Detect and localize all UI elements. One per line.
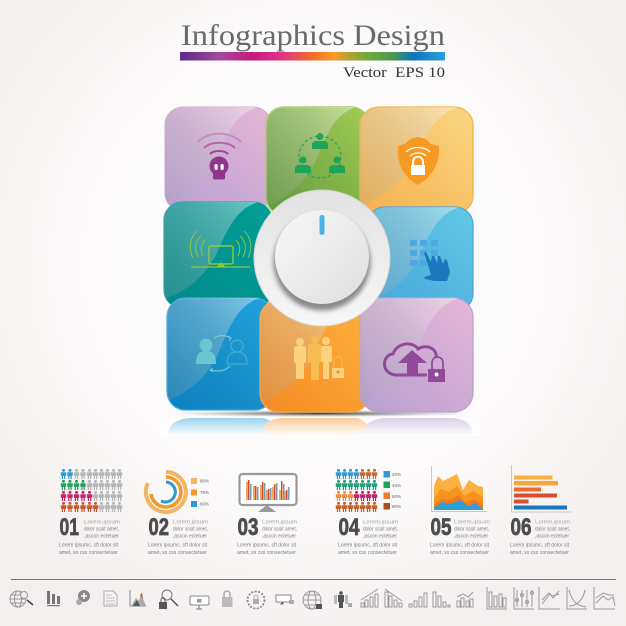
icon: falling bars (385, 589, 402, 607)
chart 2: radial rings (146, 472, 186, 512)
block 02 text: amet, xx css consectetuer (148, 550, 207, 556)
block 05 text (430, 514, 490, 556)
block 02 text: 02 (148, 514, 169, 541)
block 05 text: Lorem,ipsum (454, 520, 490, 526)
icon: small falling bars (433, 592, 450, 607)
icon: line chart (539, 587, 560, 609)
control knob (254, 190, 390, 326)
block 01 text (59, 514, 120, 556)
block 06 text: Lorem ipsumc, sft dolor sit (510, 542, 570, 548)
icon: lock monitor (190, 596, 209, 609)
block 06 text: Lorem,ipsum (535, 520, 570, 526)
panel: orange people tile (260, 300, 370, 412)
block 01 text: 01 (60, 514, 79, 541)
block 01 text: Lorem ipsumc, sft dolor sit (59, 542, 119, 548)
panel: teal monitor tile (164, 202, 272, 308)
panel: yellow shield tile (360, 107, 473, 214)
block 04 text: Lorem ipsumc, sft dolor sit (338, 542, 398, 548)
subtitle: Vector EPS 10 (343, 65, 445, 81)
icon: people with lock (294, 336, 344, 380)
block 03 text: dolor sssit amet, (262, 526, 297, 532)
block 05 text: dolor sssit amet, (454, 526, 489, 532)
block 05 text: 05 (430, 514, 452, 541)
panel: light blue keypad tile (367, 207, 473, 311)
icon: bars trend (457, 592, 473, 607)
icon: padlock (222, 591, 232, 607)
chart 2 legend: 60% (200, 502, 209, 506)
block 03 text: Lorem ipsumc, sft dolor sit (237, 542, 297, 548)
chart 4 legend: 20% (392, 472, 401, 477)
block 04 text: ,ascon ectetuer (363, 534, 397, 540)
block 06 text (510, 514, 570, 556)
panel: green people tile (266, 107, 369, 215)
block 03 text (237, 514, 297, 556)
chart 2 legend: 80% (200, 478, 209, 484)
block 04 text: Lorem,ipsum (363, 520, 398, 526)
icon: small rising bars (409, 593, 427, 607)
rainbow bar (180, 52, 445, 60)
block 02 text: Lorem ipsumc, sft dolor sit (148, 542, 208, 548)
block 03 text: ,ascon ectetuer (262, 534, 296, 540)
chart 4: coloured people rows (336, 469, 377, 512)
block 02 text (148, 514, 208, 556)
icon: people lock (334, 591, 352, 608)
panel: blue users tile (167, 298, 273, 410)
block 01 text: dolor sssit amet, (84, 526, 119, 532)
icon: gear lock (248, 592, 264, 608)
panel: purple skull tile (165, 107, 271, 211)
block 06 text: dolor sssit amet, (535, 526, 570, 532)
icon: curve chart (567, 587, 587, 609)
icon: wifi monitor (190, 231, 251, 267)
icon: lock search (159, 590, 178, 609)
panel: purple cloud tile (360, 298, 473, 412)
chart 4 legend: 40% (392, 483, 401, 488)
block 03 text: Lorem,ipsum (262, 520, 297, 526)
block 04 text (338, 514, 398, 556)
icon: plus bubble (76, 590, 90, 605)
chart 4 legend: 60% (392, 504, 401, 509)
block 03 text: 03 (238, 514, 258, 541)
tile shadow (170, 410, 470, 417)
block 04 text: amet, xx css consectetuer (338, 550, 397, 556)
icon: monitor lock (276, 595, 294, 604)
chart 4 legend: 50% (392, 494, 401, 499)
chart 2 legend: 75% (200, 490, 209, 495)
tile reflections (160, 416, 480, 436)
icon: shield with lock (398, 137, 439, 185)
icon: keypad and hand (410, 240, 450, 281)
chart 2 legend (191, 478, 209, 507)
icon: bar chart (47, 591, 60, 606)
icon: people network (295, 133, 345, 178)
title: Infographics Design (181, 19, 445, 52)
block 01 text: ,ascon ectetuer (84, 534, 119, 540)
block 05 text: ,ascon ectetuer (454, 534, 488, 540)
block 01 text: amet, xx css consectetuer (59, 550, 118, 556)
icon: document (104, 591, 117, 606)
block 03 text: amet, xx css consectetuer (237, 550, 296, 556)
chart 6: horizontal bars (512, 465, 572, 512)
icon: two users exchange (196, 336, 247, 372)
icon: rising bars (361, 589, 378, 607)
icon: area chart (594, 587, 615, 609)
block 01 text: Lorem,ipsum (84, 520, 120, 526)
icon: axis bars (487, 587, 507, 609)
icon: globe lock (303, 591, 322, 609)
icon row (10, 587, 615, 609)
icon: sliders (514, 587, 534, 609)
block 04 text: dolor sssit amet, (363, 526, 398, 532)
block 02 text: ,ascon ectetuer (173, 534, 207, 540)
icon: mountain chart (130, 590, 146, 606)
block 06 text: 06 (510, 514, 532, 541)
chart 4 legend (384, 471, 401, 510)
block 04 text: 04 (338, 514, 360, 541)
chart 5: area chart (432, 466, 487, 512)
block 05 text: Lorem ipsumc, sft dolor sit (430, 542, 490, 548)
chart 3: monitor bars (240, 474, 296, 512)
block 02 text: Lorem,ipsum (173, 520, 208, 526)
icon: globe search (10, 591, 33, 607)
chart 1: people rows (61, 469, 122, 512)
block 02 text: dolor sssit amet, (173, 526, 208, 532)
block 06 text: ,ascon ectetuer (535, 534, 569, 540)
icon: wifi skull (198, 134, 241, 180)
icon: cloud upload lock (384, 344, 445, 382)
block 05 text: amet, xx css consectetuer (430, 550, 489, 556)
block 06 text: amet, xx css consectetuer (510, 550, 569, 556)
